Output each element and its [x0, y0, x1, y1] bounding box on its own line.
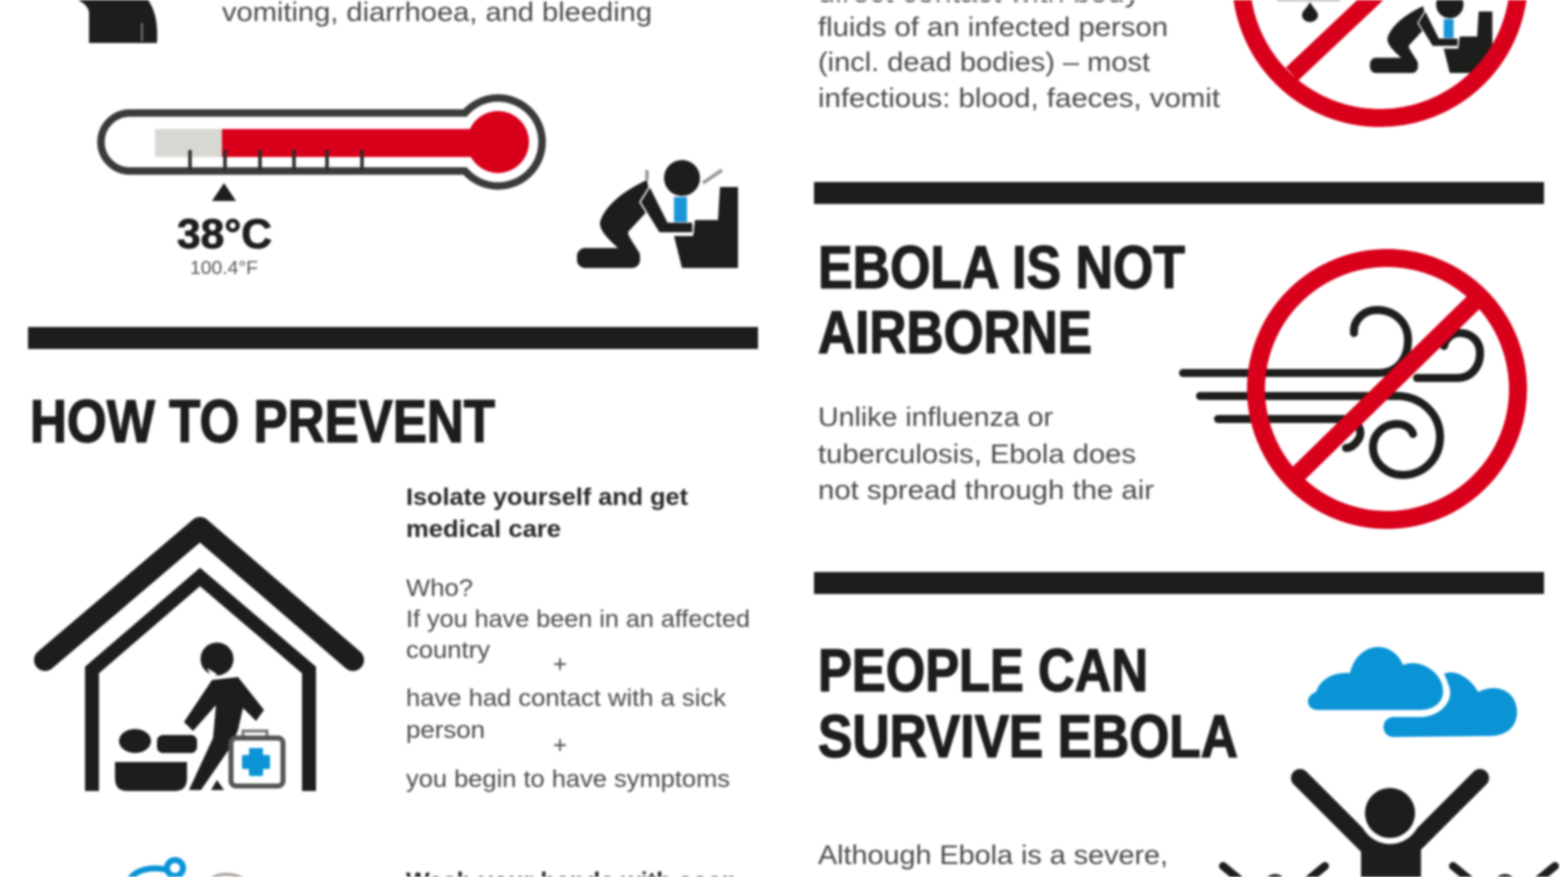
icon: house with person and medical kit — [45, 528, 353, 791]
text: not airborne: Unlike influenza or — [818, 402, 1053, 432]
contact text — [818, 0, 1221, 113]
icon: hand washing, cropped — [130, 860, 242, 877]
text: not airborne — [818, 402, 1154, 505]
panel: ebola is not airborne — [818, 234, 1518, 520]
divider bar right bottom — [814, 572, 1544, 594]
text: not airborne: tuberculosis, Ebola does — [818, 439, 1136, 469]
panel: people can survive ebola — [818, 637, 1555, 877]
heading: people can survive ebola — [818, 637, 1238, 770]
text: isolate: person — [406, 717, 485, 744]
text: isolate: + — [553, 732, 567, 759]
text: isolate: have had contact with a sick — [406, 685, 727, 712]
text: isolate: medical care — [406, 516, 561, 543]
icon: thermometer — [101, 98, 542, 186]
panel: how to prevent — [30, 388, 750, 877]
text: isolate: If you have been in an affected — [406, 606, 750, 633]
text: isolate: Isolate yourself and get — [406, 484, 688, 511]
heading: people can survive ebola: SURVIVE EBOLA — [818, 703, 1238, 770]
icon: wind crossed out — [1183, 258, 1518, 520]
icon: survivors with raised arms — [1223, 778, 1555, 877]
contact text: infectious: blood, faeces, vomit — [818, 83, 1221, 113]
text: isolate: you begin to have symptoms — [406, 766, 730, 793]
text: not airborne: not spread through the air — [818, 475, 1154, 505]
icon: person cropped at top — [78, 0, 157, 43]
fever temperature celsius: 38°C — [177, 210, 272, 257]
text: isolate — [406, 484, 750, 793]
fever temperature fahrenheit: 100.4°F — [190, 258, 258, 278]
heading: ebola is not airborne: EBOLA IS NOT — [818, 234, 1185, 301]
divider bar left — [28, 327, 758, 349]
icon: pointer triangle — [212, 183, 236, 201]
text: isolate: + — [553, 651, 567, 678]
text: survive: Although Ebola is a severe, — [818, 840, 1168, 870]
contact text: fluids of an infected person — [818, 12, 1168, 42]
panel: contact transmission — [818, 0, 1519, 118]
text: isolate: country — [406, 637, 490, 664]
icon: prohibited contact with vomiting person — [1241, 0, 1519, 118]
divider bar right top — [814, 182, 1544, 204]
heading: people can survive ebola: PEOPLE CAN — [818, 637, 1148, 704]
heading: how to prevent: HOW TO PREVENT — [30, 388, 495, 455]
icon: person vomiting into toilet — [577, 160, 738, 268]
icon: clouds — [1308, 647, 1517, 737]
text: isolate: Who? — [406, 575, 473, 602]
panel: symptoms — [78, 0, 738, 278]
heading: ebola is not airborne: AIRBORNE — [818, 299, 1092, 366]
heading: ebola is not airborne — [818, 234, 1185, 366]
contact text: (incl. dead bodies) – most — [818, 47, 1151, 77]
